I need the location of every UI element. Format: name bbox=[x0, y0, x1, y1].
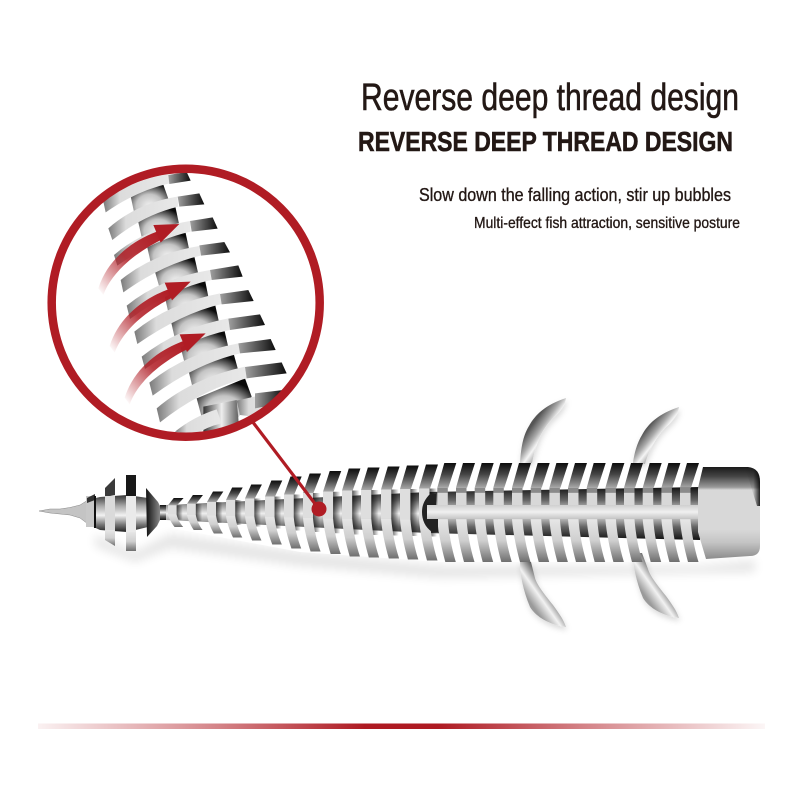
pointer dot bbox=[312, 502, 326, 516]
thick threaded ribs bbox=[437, 463, 699, 562]
text: second descriptive line: Multi-effect fish attraction, sensitive posture bbox=[474, 215, 740, 232]
fins on the lower side bbox=[520, 553, 679, 627]
magnified core tiles bbox=[129, 180, 252, 437]
soft shadow under the lure bbox=[95, 534, 755, 578]
pointer line from magnifier to lure bbox=[252, 421, 319, 509]
tapered threaded ribs bbox=[168, 464, 438, 560]
fins on the upper side bbox=[520, 398, 679, 464]
soft lure illustration bbox=[39, 398, 760, 627]
red flow arrows bbox=[98, 224, 206, 404]
text: first descriptive line: Slow down the falling action, stir up bubbles bbox=[419, 185, 731, 205]
magnified detail circle bbox=[52, 169, 320, 437]
bottom gradient divider bar bbox=[38, 724, 765, 729]
body core bbox=[166, 487, 700, 540]
magnified dark thread tips bbox=[168, 172, 287, 408]
centre light strip with rounded dark end bbox=[422, 494, 700, 532]
magnified light thread strips bbox=[104, 174, 262, 432]
magnifier ring bbox=[52, 169, 320, 437]
white silhouette behind the lure bbox=[166, 463, 700, 562]
blunt head end bbox=[698, 467, 760, 559]
tail spike bbox=[39, 500, 88, 524]
tail bulb bbox=[86, 475, 168, 551]
